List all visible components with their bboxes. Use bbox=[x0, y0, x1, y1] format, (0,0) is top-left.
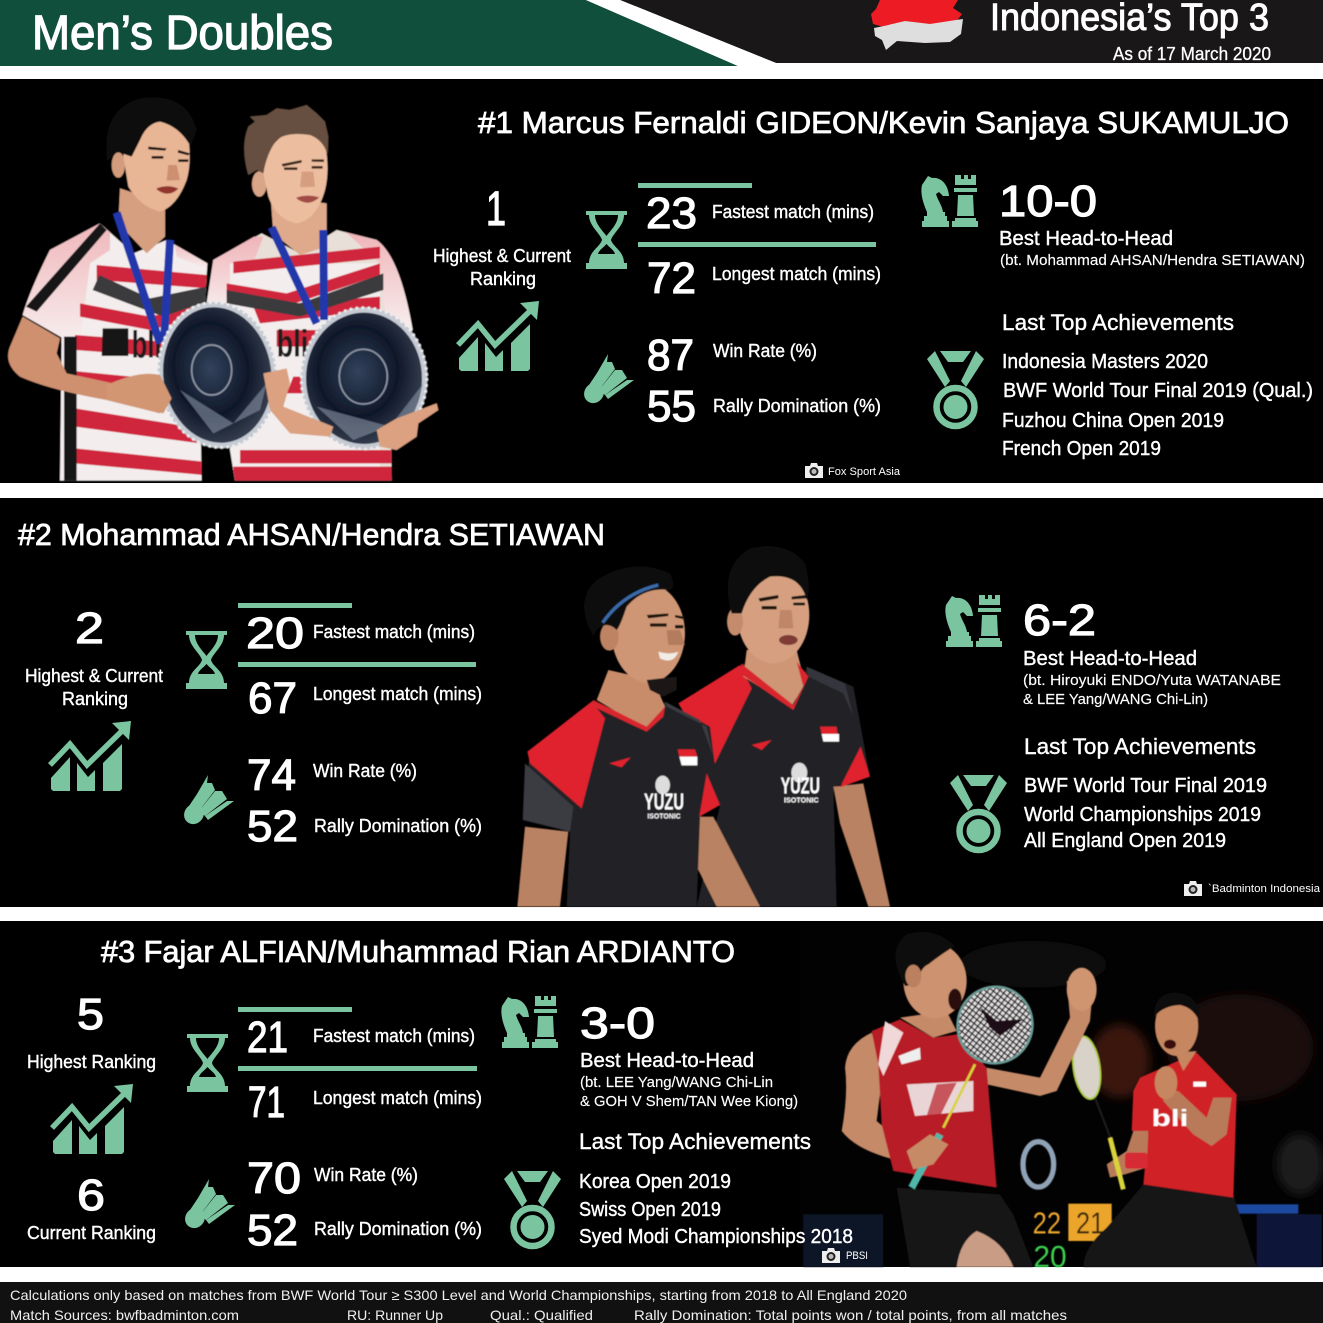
head-to-head block: 10-0 bbox=[999, 177, 1097, 226]
panel: #1 Gideon / Sukamuljo bbox=[0, 79, 1323, 483]
photo credit bbox=[1184, 881, 1321, 896]
head-to-head block: Best Head-to-Head bbox=[580, 1050, 754, 1072]
heading: #3 Fajar ALFIAN/Muhammad Rian ARDIANTO bbox=[101, 934, 735, 969]
match duration stats: 23 bbox=[646, 189, 697, 238]
match duration stats bbox=[238, 603, 482, 723]
heading: #2 Mohammad AHSAN/Hendra SETIAWAN bbox=[18, 517, 605, 552]
head-to-head block: 6-2 bbox=[1023, 596, 1096, 645]
match duration stats: Fastest match (mins) bbox=[712, 202, 874, 222]
ranking block: Highest & Current bbox=[25, 666, 163, 686]
head-to-head block: 3-0 bbox=[580, 999, 655, 1048]
icon: trend chart bbox=[50, 721, 131, 791]
photo: Gideon and Sukamuljo with plates: bli bbox=[132, 324, 162, 367]
icon: chess pieces bbox=[945, 595, 1002, 647]
jersey sponsor marks: YUZU bbox=[644, 788, 684, 814]
achievements list: Last Top Achievements bbox=[1024, 734, 1256, 759]
match duration stats: Longest match (mins) bbox=[313, 684, 482, 704]
win and rally stats: Rally Domination (%) bbox=[314, 816, 482, 836]
ranking block: Ranking bbox=[470, 269, 536, 289]
footer notes bbox=[0, 1282, 1323, 1323]
icon: shuttlecock bbox=[580, 354, 634, 407]
ranking block: 1 bbox=[486, 183, 506, 236]
photo: Alfian and Ardianto celebrating: 20 bbox=[1033, 1240, 1067, 1274]
win and rally stats: Win Rate (%) bbox=[713, 341, 817, 361]
win and rally stats bbox=[247, 751, 482, 851]
main title: Men’s Doubles bbox=[32, 7, 333, 60]
win and rally stats: Win Rate (%) bbox=[314, 1165, 418, 1185]
head-to-head block: Best Head-to-Head bbox=[999, 228, 1173, 250]
player two bbox=[1083, 1184, 1257, 1267]
win and rally stats: Rally Domination (%) bbox=[713, 396, 881, 416]
achievements list bbox=[579, 1129, 853, 1248]
photo credit: PBSI bbox=[846, 1250, 868, 1262]
win and rally stats: Rally Domination (%) bbox=[314, 1219, 482, 1239]
head-to-head block: (bt. LEE Yang/WANG Chi-Lin bbox=[580, 1074, 773, 1091]
win and rally stats: 52 bbox=[247, 1206, 298, 1255]
win and rally stats: 87 bbox=[647, 331, 694, 380]
heading: #1 Marcus Fernaldi GIDEON/Kevin Sanjaya SUKAMULJO bbox=[478, 105, 1289, 140]
match duration stats: 20 bbox=[246, 609, 304, 658]
photo: Alfian and Ardianto celebrating: 22 bbox=[1033, 1207, 1061, 1241]
footer notes: RU: Runner Up bbox=[347, 1307, 443, 1323]
icon: hourglass bbox=[186, 631, 227, 689]
photo: Gideon and Sukamuljo with plates: bli bbox=[277, 323, 308, 366]
header banner bbox=[0, 0, 1323, 66]
head-to-head block: & GOH V Shem/TAN Wee Kiong) bbox=[580, 1093, 798, 1110]
match duration stats: 72 bbox=[647, 254, 696, 303]
achievements list: Last Top Achievements bbox=[1002, 310, 1234, 335]
panel: #2 Ahsan / Setiawan bbox=[0, 498, 1323, 907]
match duration stats: Fastest match (mins) bbox=[313, 1026, 475, 1046]
photo: Ahsan and Setiawan bbox=[517, 546, 890, 907]
achievements list: French Open 2019 bbox=[1002, 438, 1161, 460]
head-to-head block: (bt. Hiroyuki ENDO/Yuta WATANABE bbox=[1023, 672, 1281, 689]
win and rally stats: 55 bbox=[647, 382, 696, 431]
win and rally stats: 70 bbox=[247, 1154, 301, 1203]
footer notes: Rally Domination: Total points won / total points, from all matches bbox=[634, 1307, 1067, 1323]
achievements list: All England Open 2019 bbox=[1024, 830, 1226, 852]
match duration stats: Fastest match (mins) bbox=[313, 622, 475, 642]
ranking block: Current Ranking bbox=[27, 1223, 156, 1243]
footer notes: Calculations only based on matches from BWF World Tour ≥ S300 Level and World Championships, starting from 2018 to All England 2020 bbox=[10, 1287, 907, 1303]
achievements list: Fuzhou China Open 2019 bbox=[1002, 410, 1224, 432]
jersey sponsor marks: ISOTONIC bbox=[647, 811, 681, 820]
achievements list bbox=[1002, 310, 1313, 460]
date note: As of 17 March 2020 bbox=[1113, 44, 1271, 64]
icon: trend chart bbox=[52, 1084, 133, 1154]
icon: Indonesian flag brush bbox=[871, 0, 963, 50]
head-to-head block bbox=[999, 177, 1305, 269]
achievements list: World Championships 2019 bbox=[1024, 804, 1261, 826]
win and rally stats: 52 bbox=[247, 802, 298, 851]
footer notes: Match Sources: bwfbadminton.com bbox=[10, 1307, 239, 1323]
player one bbox=[897, 1188, 1033, 1267]
ranking block bbox=[25, 604, 163, 709]
photo credit bbox=[805, 463, 901, 478]
icon: shuttlecock bbox=[181, 1179, 235, 1232]
icon: trend chart bbox=[458, 301, 539, 371]
footer notes: Qual.: Qualified bbox=[490, 1307, 593, 1323]
ranking block: 2 bbox=[75, 604, 104, 653]
ranking block: Ranking bbox=[62, 689, 128, 709]
match duration stats: Longest match (mins) bbox=[712, 264, 881, 284]
ranking block: Highest & Current bbox=[433, 246, 571, 266]
ranking block bbox=[27, 990, 156, 1243]
ranking block: 5 bbox=[77, 990, 104, 1039]
jersey sponsor marks bbox=[644, 763, 820, 820]
ranking block: 6 bbox=[77, 1171, 105, 1220]
achievements list: Indonesia Masters 2020 bbox=[1002, 351, 1208, 373]
achievements list: Syed Modi Championships 2018 bbox=[579, 1226, 853, 1248]
achievements list: BWF World Tour Final 2019 bbox=[1024, 775, 1267, 797]
win and rally stats: Win Rate (%) bbox=[313, 761, 417, 781]
achievements list: Swiss Open 2019 bbox=[579, 1199, 721, 1221]
photo credit: `Badminton Indonesia bbox=[1208, 883, 1321, 895]
icon: hourglass bbox=[586, 211, 627, 269]
jersey sponsor marks: ISOTONIC bbox=[784, 796, 819, 805]
head-to-head block: Best Head-to-Head bbox=[1023, 648, 1197, 670]
icon: medal bbox=[504, 1171, 561, 1246]
match duration stats: Longest match (mins) bbox=[313, 1088, 482, 1108]
icon: medal bbox=[950, 775, 1007, 850]
photo: Alfian and Ardianto celebrating bbox=[800, 921, 1323, 1274]
win and rally stats bbox=[647, 331, 881, 431]
match duration stats: 21 bbox=[247, 1013, 288, 1062]
icon: hourglass bbox=[187, 1034, 228, 1092]
icon: shuttlecock bbox=[180, 775, 234, 828]
head-to-head block bbox=[1023, 596, 1281, 708]
match duration stats bbox=[638, 183, 881, 303]
photo: Gideon and Sukamuljo with plates bbox=[0, 90, 443, 482]
ranking block: Highest Ranking bbox=[27, 1052, 156, 1072]
match duration stats: 67 bbox=[248, 674, 297, 723]
photo: Alfian and Ardianto celebrating: 21 bbox=[1076, 1207, 1104, 1241]
icon: chess pieces bbox=[501, 996, 558, 1048]
match duration stats bbox=[238, 1007, 482, 1127]
win and rally stats: 74 bbox=[247, 751, 296, 800]
head-to-head block: & LEE Yang/WANG Chi-Lin) bbox=[1023, 691, 1208, 708]
achievements list bbox=[1024, 734, 1267, 852]
ranking block bbox=[433, 183, 571, 289]
achievements list: BWF World Tour Final 2019 (Qual.) bbox=[1003, 380, 1313, 402]
achievements list: Korea Open 2019 bbox=[579, 1171, 731, 1193]
achievements list: Last Top Achievements bbox=[579, 1129, 811, 1154]
photo credit: Fox Sport Asia bbox=[828, 466, 901, 478]
win and rally stats bbox=[247, 1154, 482, 1255]
match duration stats: 71 bbox=[248, 1078, 285, 1127]
photo: Alfian and Ardianto celebrating: bli bbox=[1152, 1105, 1188, 1131]
jersey sponsor marks: YUZU bbox=[781, 772, 820, 798]
head-to-head block bbox=[580, 999, 798, 1110]
panel: #3 Alfian / Ardianto bbox=[0, 921, 1323, 1274]
icon: medal bbox=[927, 351, 984, 426]
head-to-head block: (bt. Mohammad AHSAN/Hendra SETIAWAN) bbox=[1000, 252, 1305, 269]
icon: chess pieces bbox=[921, 175, 978, 227]
photo credit bbox=[822, 1248, 868, 1263]
